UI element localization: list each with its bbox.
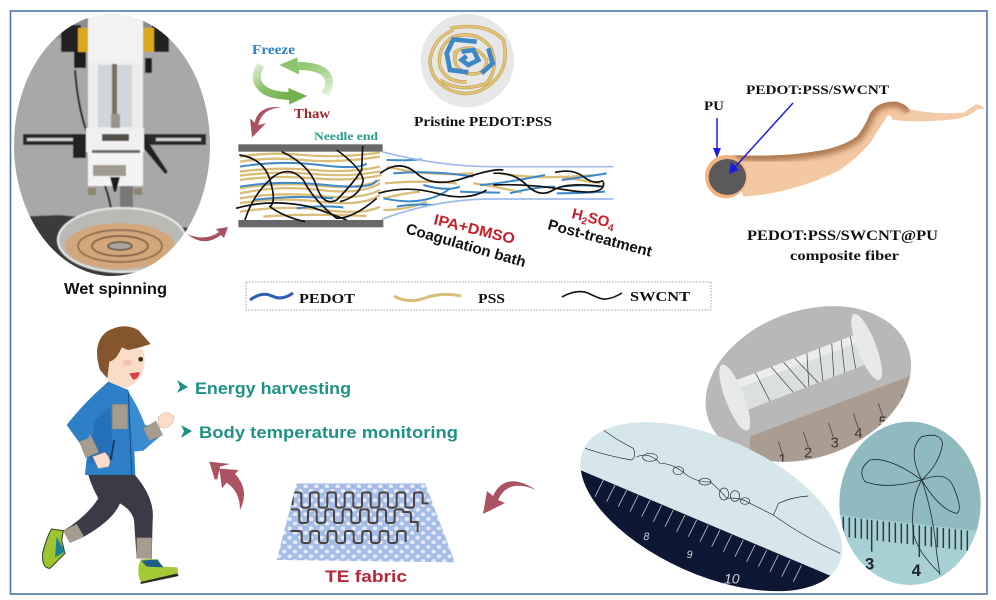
arrow: wet spinning to needle xyxy=(187,227,228,241)
legend: SWCNT label: SWCNT xyxy=(630,290,691,305)
label: H2SO4: 2 xyxy=(580,216,589,228)
runner legs xyxy=(63,475,153,558)
runner jacket xyxy=(67,382,162,475)
label: H2SO4: H xyxy=(570,205,585,225)
fiber tail xyxy=(892,104,985,121)
diagram: needle and fibers xyxy=(236,144,613,227)
caption: composite fiber: composite fiber xyxy=(790,249,899,264)
fiber jet outline xyxy=(382,152,613,219)
photo: spool: 1 xyxy=(778,452,786,468)
label: freeze: Freeze xyxy=(252,42,295,57)
photo: clover fiber on ruler xyxy=(837,420,983,587)
photo: spool: 4 xyxy=(854,426,862,442)
label: PU: PU xyxy=(704,98,725,113)
fiber core xyxy=(709,159,746,195)
label: IPA+DMSO: IPA+DMSO xyxy=(432,211,517,248)
icon: freeze thaw cycle xyxy=(257,57,329,105)
needle walls xyxy=(238,144,383,227)
arrow: fibers to fabric xyxy=(483,481,536,514)
label: needle end: Needle end xyxy=(314,129,378,143)
label: pristine PEDOT:PSS: Pristine PEDOT:PSS xyxy=(414,115,552,130)
caption: composite fiber name: PEDOT:PSS/SWCNT@PU xyxy=(747,228,939,244)
photo: spool: 3 xyxy=(831,436,839,452)
PEDOT chains xyxy=(240,159,607,208)
panel: pristine PEDOT:PSS illustration xyxy=(421,14,514,107)
legend: PSS label: PSS xyxy=(478,292,505,307)
TE fabric patches xyxy=(63,404,163,558)
PSS chains xyxy=(240,153,600,217)
photo: wet spinning apparatus xyxy=(14,14,210,276)
runner shoes xyxy=(43,529,179,584)
fiber body xyxy=(730,102,910,196)
runner hands xyxy=(93,413,174,468)
legend: PEDOT label: PEDOT xyxy=(299,292,356,307)
label: post-treatment: Post-treatment xyxy=(546,216,654,261)
fabric conductive traces xyxy=(291,492,429,543)
runner head xyxy=(97,326,151,388)
illustration: TE fabric xyxy=(277,483,455,562)
SWCNT chains xyxy=(236,146,604,222)
arrow: to PU sheath xyxy=(713,118,721,158)
photo: spool: 5 xyxy=(879,415,887,431)
photo: spool xyxy=(706,306,911,462)
photo: knotted fiber on ruler: 8 xyxy=(643,531,649,543)
legend: PSS swatch xyxy=(394,294,461,301)
label: core material: PEDOT:PSS/SWCNT xyxy=(746,82,889,97)
arrow: fabric to runner xyxy=(209,462,244,510)
label: H2SO4: 4 xyxy=(607,222,615,234)
bullet: energy harvesting: Energy harvesting xyxy=(195,379,351,398)
photo: knotted fiber on ruler: 9 xyxy=(687,549,693,561)
label: thaw: Thaw xyxy=(294,106,330,121)
illustration: runner xyxy=(43,326,179,584)
photos of fibers xyxy=(570,300,983,597)
label: coagulation bath: Coagulation bath xyxy=(404,221,528,271)
fiber end sheath xyxy=(705,155,747,198)
photo: clover fiber on ruler: 4 xyxy=(912,561,922,580)
label: H2SO4: SO xyxy=(586,209,611,231)
panel: composite fiber xyxy=(705,97,985,200)
arrow: to core xyxy=(729,103,793,174)
label: wet spinning: Wet spinning xyxy=(64,281,167,298)
photo: knotted fiber on ruler xyxy=(570,420,847,597)
photo: spool: 2 xyxy=(804,445,812,461)
photo: clover fiber on ruler: 3 xyxy=(865,554,874,573)
legend: PEDOT swatch xyxy=(250,293,293,300)
legend xyxy=(246,282,711,310)
photo: knotted fiber on ruler: 10 xyxy=(724,570,740,586)
arrow: thaw to needle xyxy=(250,107,282,137)
bullet: body temperature monitoring: Body temperature monitoring xyxy=(199,423,458,442)
label: TE fabric: TE fabric xyxy=(325,567,407,586)
legend: SWCNT swatch xyxy=(562,292,622,299)
